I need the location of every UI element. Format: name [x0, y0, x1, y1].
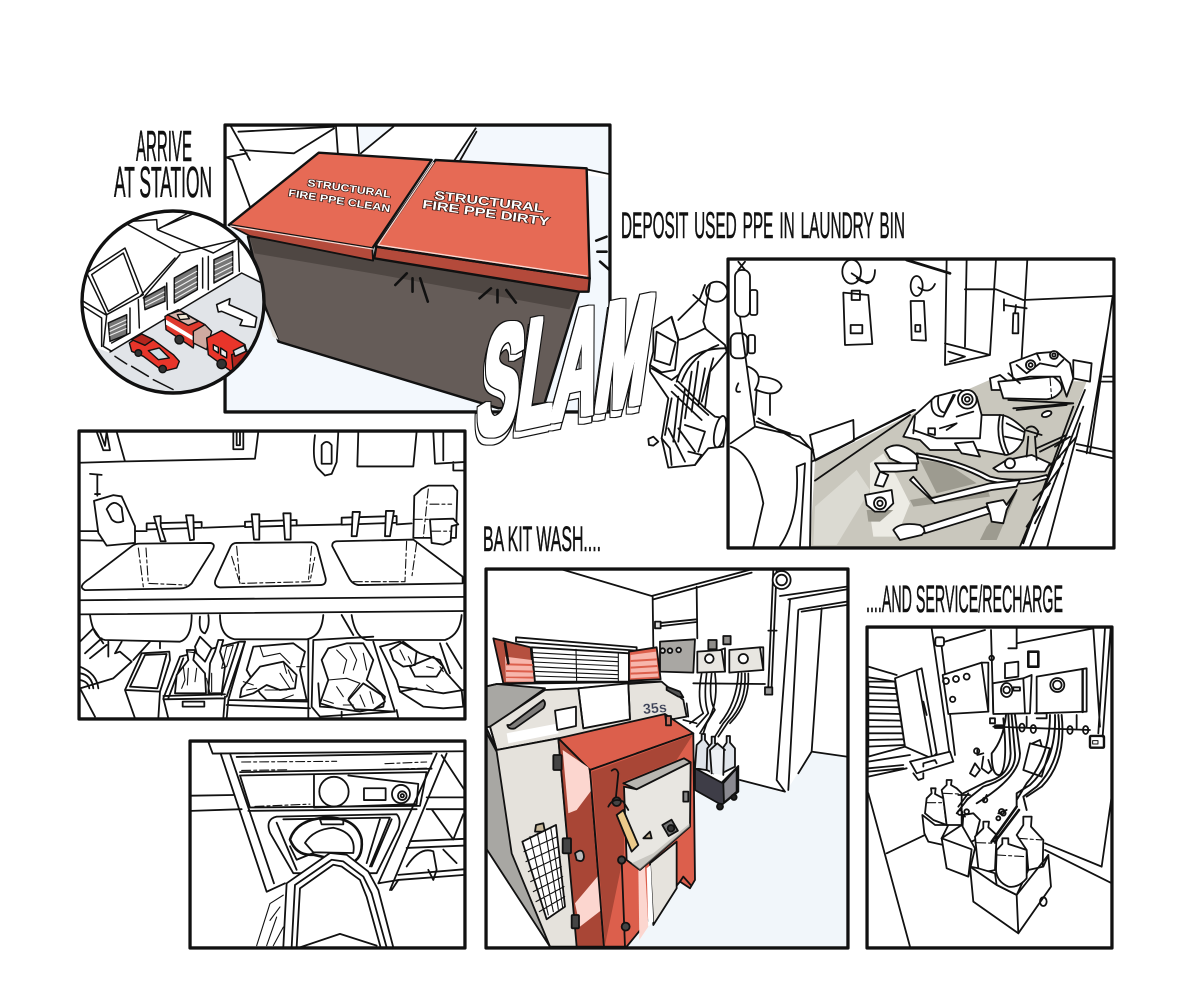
text: SLAM: [469, 259, 662, 472]
bin lid: clean: [229, 153, 432, 261]
front cart cylinders: [970, 807, 1051, 933]
rear cart and cylinders: [922, 780, 962, 845]
knob and pipe: [935, 630, 994, 713]
air hoses: [683, 673, 748, 737]
panel: BA kit wash machine: [485, 568, 848, 948]
bench top: [810, 378, 1087, 547]
wall control boxes: [660, 636, 763, 673]
worktop edges: [80, 523, 465, 614]
hanging jacket: [731, 262, 813, 547]
BA set on bench: rear: [990, 351, 1092, 418]
roller shutter window: [868, 668, 953, 780]
sink 1: [82, 543, 214, 590]
hinges: [553, 755, 630, 931]
laundry tray with folded cloth: [312, 637, 398, 718]
white tub: [125, 652, 170, 718]
text: BA KIT WASH....: [483, 520, 601, 559]
text: ARRIVE: [136, 122, 192, 171]
room lines: [868, 628, 1112, 947]
lid text: FIRE PPE CLEAN: [288, 188, 391, 215]
sink 2: [215, 542, 326, 587]
panel: service and recharge station: [867, 627, 1112, 948]
yellow cylinder and valve: [608, 769, 638, 852]
hook and tag 1: [842, 260, 875, 345]
laundry bag held at drum: [257, 853, 393, 947]
machine frame and shelves: [192, 742, 465, 892]
panel: sinks and dirty laundry trays: [79, 431, 465, 719]
BA set on bench: front: [860, 390, 1067, 540]
lid text: STRUCTURAL: [434, 188, 545, 215]
hook and tag 2: [911, 276, 935, 341]
wall lines and pipes: [558, 568, 847, 792]
hoses: [963, 715, 1062, 810]
machine control panel: [237, 754, 432, 811]
taps: [147, 511, 397, 541]
station forecourt: [96, 274, 262, 392]
panel: hanging BA sets and bench: [728, 259, 1114, 548]
panel: washing machine: [190, 741, 465, 948]
underside of sinks: [90, 615, 462, 642]
trolley: [695, 766, 738, 810]
middle cart and cylinder: [942, 793, 1007, 877]
bottle crate: [163, 637, 245, 718]
manifold line and switch: [990, 713, 1104, 748]
arrow: [217, 299, 257, 327]
bin body: [248, 237, 579, 408]
gauge panel right: [1037, 668, 1087, 713]
station building: [83, 212, 262, 391]
cabinet control box: [623, 758, 691, 870]
detergent bottle with pump: [90, 474, 135, 546]
red wash cabinet: [558, 714, 695, 947]
impact marks: [395, 237, 610, 303]
lid text: STRUCTURAL: [307, 178, 391, 201]
sink 3: [332, 540, 463, 585]
icon: station inset circle: [80, 211, 270, 398]
lid text: FIRE PPE DIRTY: [422, 197, 550, 229]
drum door: [268, 814, 457, 880]
machine housing: [485, 682, 687, 947]
heading: arrive at station: [114, 122, 212, 207]
machine model number: 35s: [642, 700, 668, 718]
wall panel with dials: [943, 663, 988, 714]
wall fittings: [80, 432, 463, 476]
machine vent grille: [522, 823, 565, 919]
BA set hanging on hook: [648, 282, 729, 468]
pipe ring: [773, 571, 791, 589]
hook and tag 3: [1004, 299, 1027, 333]
clipboard and tool: [970, 740, 1050, 777]
fire truck: [165, 310, 249, 373]
bin lid: dirty: [374, 160, 590, 292]
stuff under left sink: [80, 628, 160, 717]
laundry tray with gloves: [227, 640, 310, 718]
roller shutter with red panels: [493, 637, 661, 683]
gauge panel left: [993, 652, 1038, 714]
wall and lockers: [945, 260, 1113, 458]
right laundry pile: [380, 642, 463, 708]
car: [129, 334, 179, 373]
floor: [627, 752, 847, 948]
chemical jerrycan and jug: [413, 486, 458, 545]
panel: laundry bin: [225, 125, 610, 412]
wall background: [225, 125, 610, 225]
air cylinders: [695, 734, 735, 775]
lid text: [288, 178, 550, 229]
text: AT STATION: [114, 158, 212, 207]
